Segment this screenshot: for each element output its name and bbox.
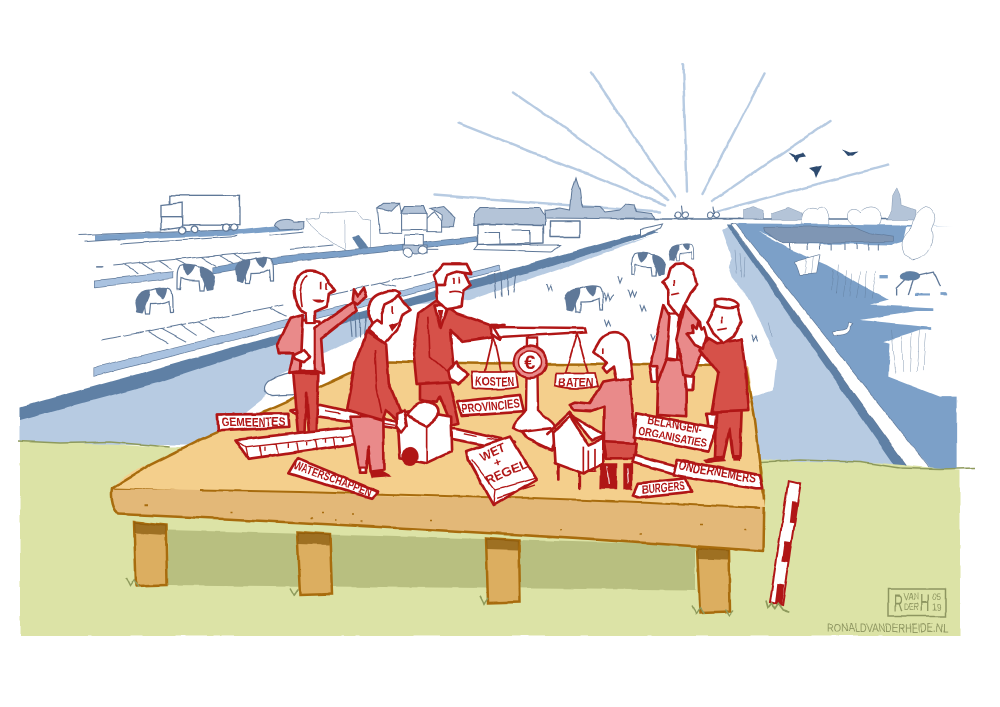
book wet en regel: REGEL [484,457,530,488]
platform speckles [145,505,747,534]
people and objects right [522,263,763,497]
platform [111,362,765,551]
dark canal bank [20,230,658,420]
label waterschappen: WATERSCHAPPEN [292,458,373,499]
label waterschappen [288,458,378,499]
label burgers: BURGERS [641,478,686,497]
woman pointing [277,271,367,432]
book wet en regel [467,437,537,505]
grass ground [20,441,960,636]
woman with long hair [569,333,637,489]
scale beam [494,327,586,337]
ruler [235,427,356,459]
label belangen organisaties: BELANGEN- [646,412,703,437]
tractor [403,235,438,257]
left land outlines [79,223,500,376]
label baten: BATEN [558,376,594,390]
scale stand [513,338,555,432]
birds [788,149,858,178]
industrial building [474,208,580,252]
right canal and bank [722,207,957,473]
label belangen organisaties: ORGANISATIES [637,423,708,450]
cyclists [675,206,719,218]
white strip along bank [640,224,662,236]
signature stamp: H [920,590,930,617]
dike dark side [726,224,910,470]
cows [135,244,694,314]
top road strip [95,223,302,241]
euro dial: € [525,353,536,374]
village houses [377,203,455,233]
light canal [722,225,897,467]
road strip right [632,455,677,474]
platform top [112,362,765,507]
measuring pole [766,481,801,612]
label belangen organisaties [633,412,717,452]
white land in water [758,226,957,397]
hangers [485,333,588,373]
horizon right: buildings and trees [744,187,915,230]
platform leg shadows [134,522,729,560]
people and objects left [217,264,537,505]
book wet en regel: + [492,455,504,470]
truck [161,195,240,234]
swan [832,323,853,335]
illustration [18,63,975,636]
label provincies: PROVINCIES [461,396,520,416]
solar jetty [763,227,893,243]
standing curly man [649,263,703,417]
grass tufts [546,277,758,341]
label kosten: KOSTEN [476,375,514,389]
man with suit [413,264,505,425]
website credit: RONALDVANDERHEIDE.NL [827,621,948,635]
man with raised hand [687,299,748,463]
label burgers [633,478,692,497]
signature stamp: DER [904,602,919,613]
signature stamp: 19 [932,602,941,612]
house model [547,413,605,488]
paper beside scale [522,428,557,450]
tree on land [903,207,934,260]
grass edge line [18,441,975,469]
label gemeentes: GEMEENTES [222,415,285,429]
platform front face [111,488,764,551]
label gemeentes [217,413,289,431]
stamp machine [397,401,452,465]
platform legs [134,522,730,613]
middle ditch [94,272,173,287]
left canal [20,236,650,445]
white field blob by woman [265,372,310,396]
dam with culvert [275,212,371,250]
inlet patches [795,255,820,275]
signature stamp [888,589,946,617]
grass tufts at legs [126,578,733,616]
label ondernemers: ONDERNEMERS [678,458,757,486]
horizon town left [545,178,905,219]
reeds [805,257,926,373]
lower ditch [94,265,500,376]
man with sweater [347,291,410,478]
reeds on left bank [350,272,516,337]
signature stamp: R [894,590,903,617]
balance scale [472,327,598,432]
signature stamp: VAN [904,592,919,603]
road strip [290,405,515,450]
water [732,223,957,472]
book wet en regel: WET [478,440,508,464]
sun rays [434,63,888,212]
signature stamp: 05 [932,592,941,602]
platform shadow [168,530,695,590]
heron [897,271,940,296]
dike white top [731,223,933,473]
